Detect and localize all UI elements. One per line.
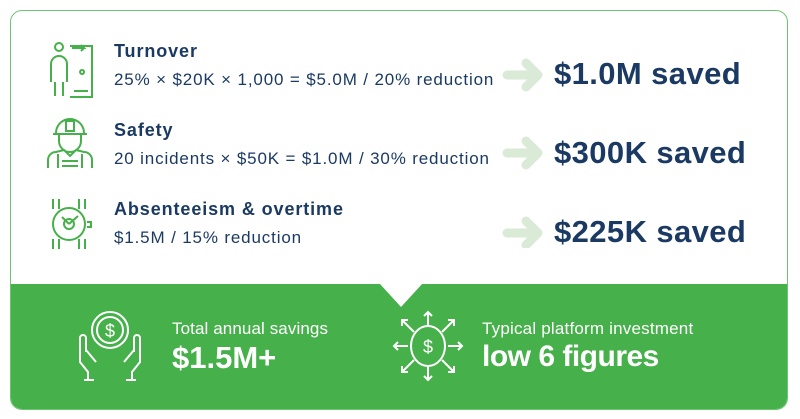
icon: turnover xyxy=(50,42,93,98)
icon: dollar arrows: $ xyxy=(423,337,433,357)
text: $300K saved xyxy=(554,135,746,170)
icon: clock xyxy=(52,199,92,249)
row: absenteeism: Absenteeism & overtime xyxy=(114,199,344,219)
text: 20 incidents × $50K = $1.0M / 30% reduction xyxy=(114,149,490,168)
row: turnover: Turnover xyxy=(114,41,198,61)
green band xyxy=(11,284,787,411)
platform investment: Typical platform investment xyxy=(482,319,693,338)
icon: hands coin xyxy=(79,311,141,381)
arrows xyxy=(502,58,542,248)
icon: safety xyxy=(47,118,93,168)
icon: dollar arrows xyxy=(392,310,464,382)
row: safety: Safety xyxy=(114,120,173,140)
notch xyxy=(380,284,422,307)
text: 25% × $20K × 1,000 = $5.0M / 20% reduction xyxy=(114,70,494,89)
total savings: Total annual savings xyxy=(172,319,328,338)
text: $1.5M / 15% reduction xyxy=(114,228,302,247)
icon: hands coin: $ xyxy=(105,321,115,341)
text: $225K saved xyxy=(554,214,746,249)
text: low 6 figures xyxy=(482,340,659,373)
savings values: $1.0M saved xyxy=(554,56,741,91)
text: $1.5M+ xyxy=(172,340,276,375)
